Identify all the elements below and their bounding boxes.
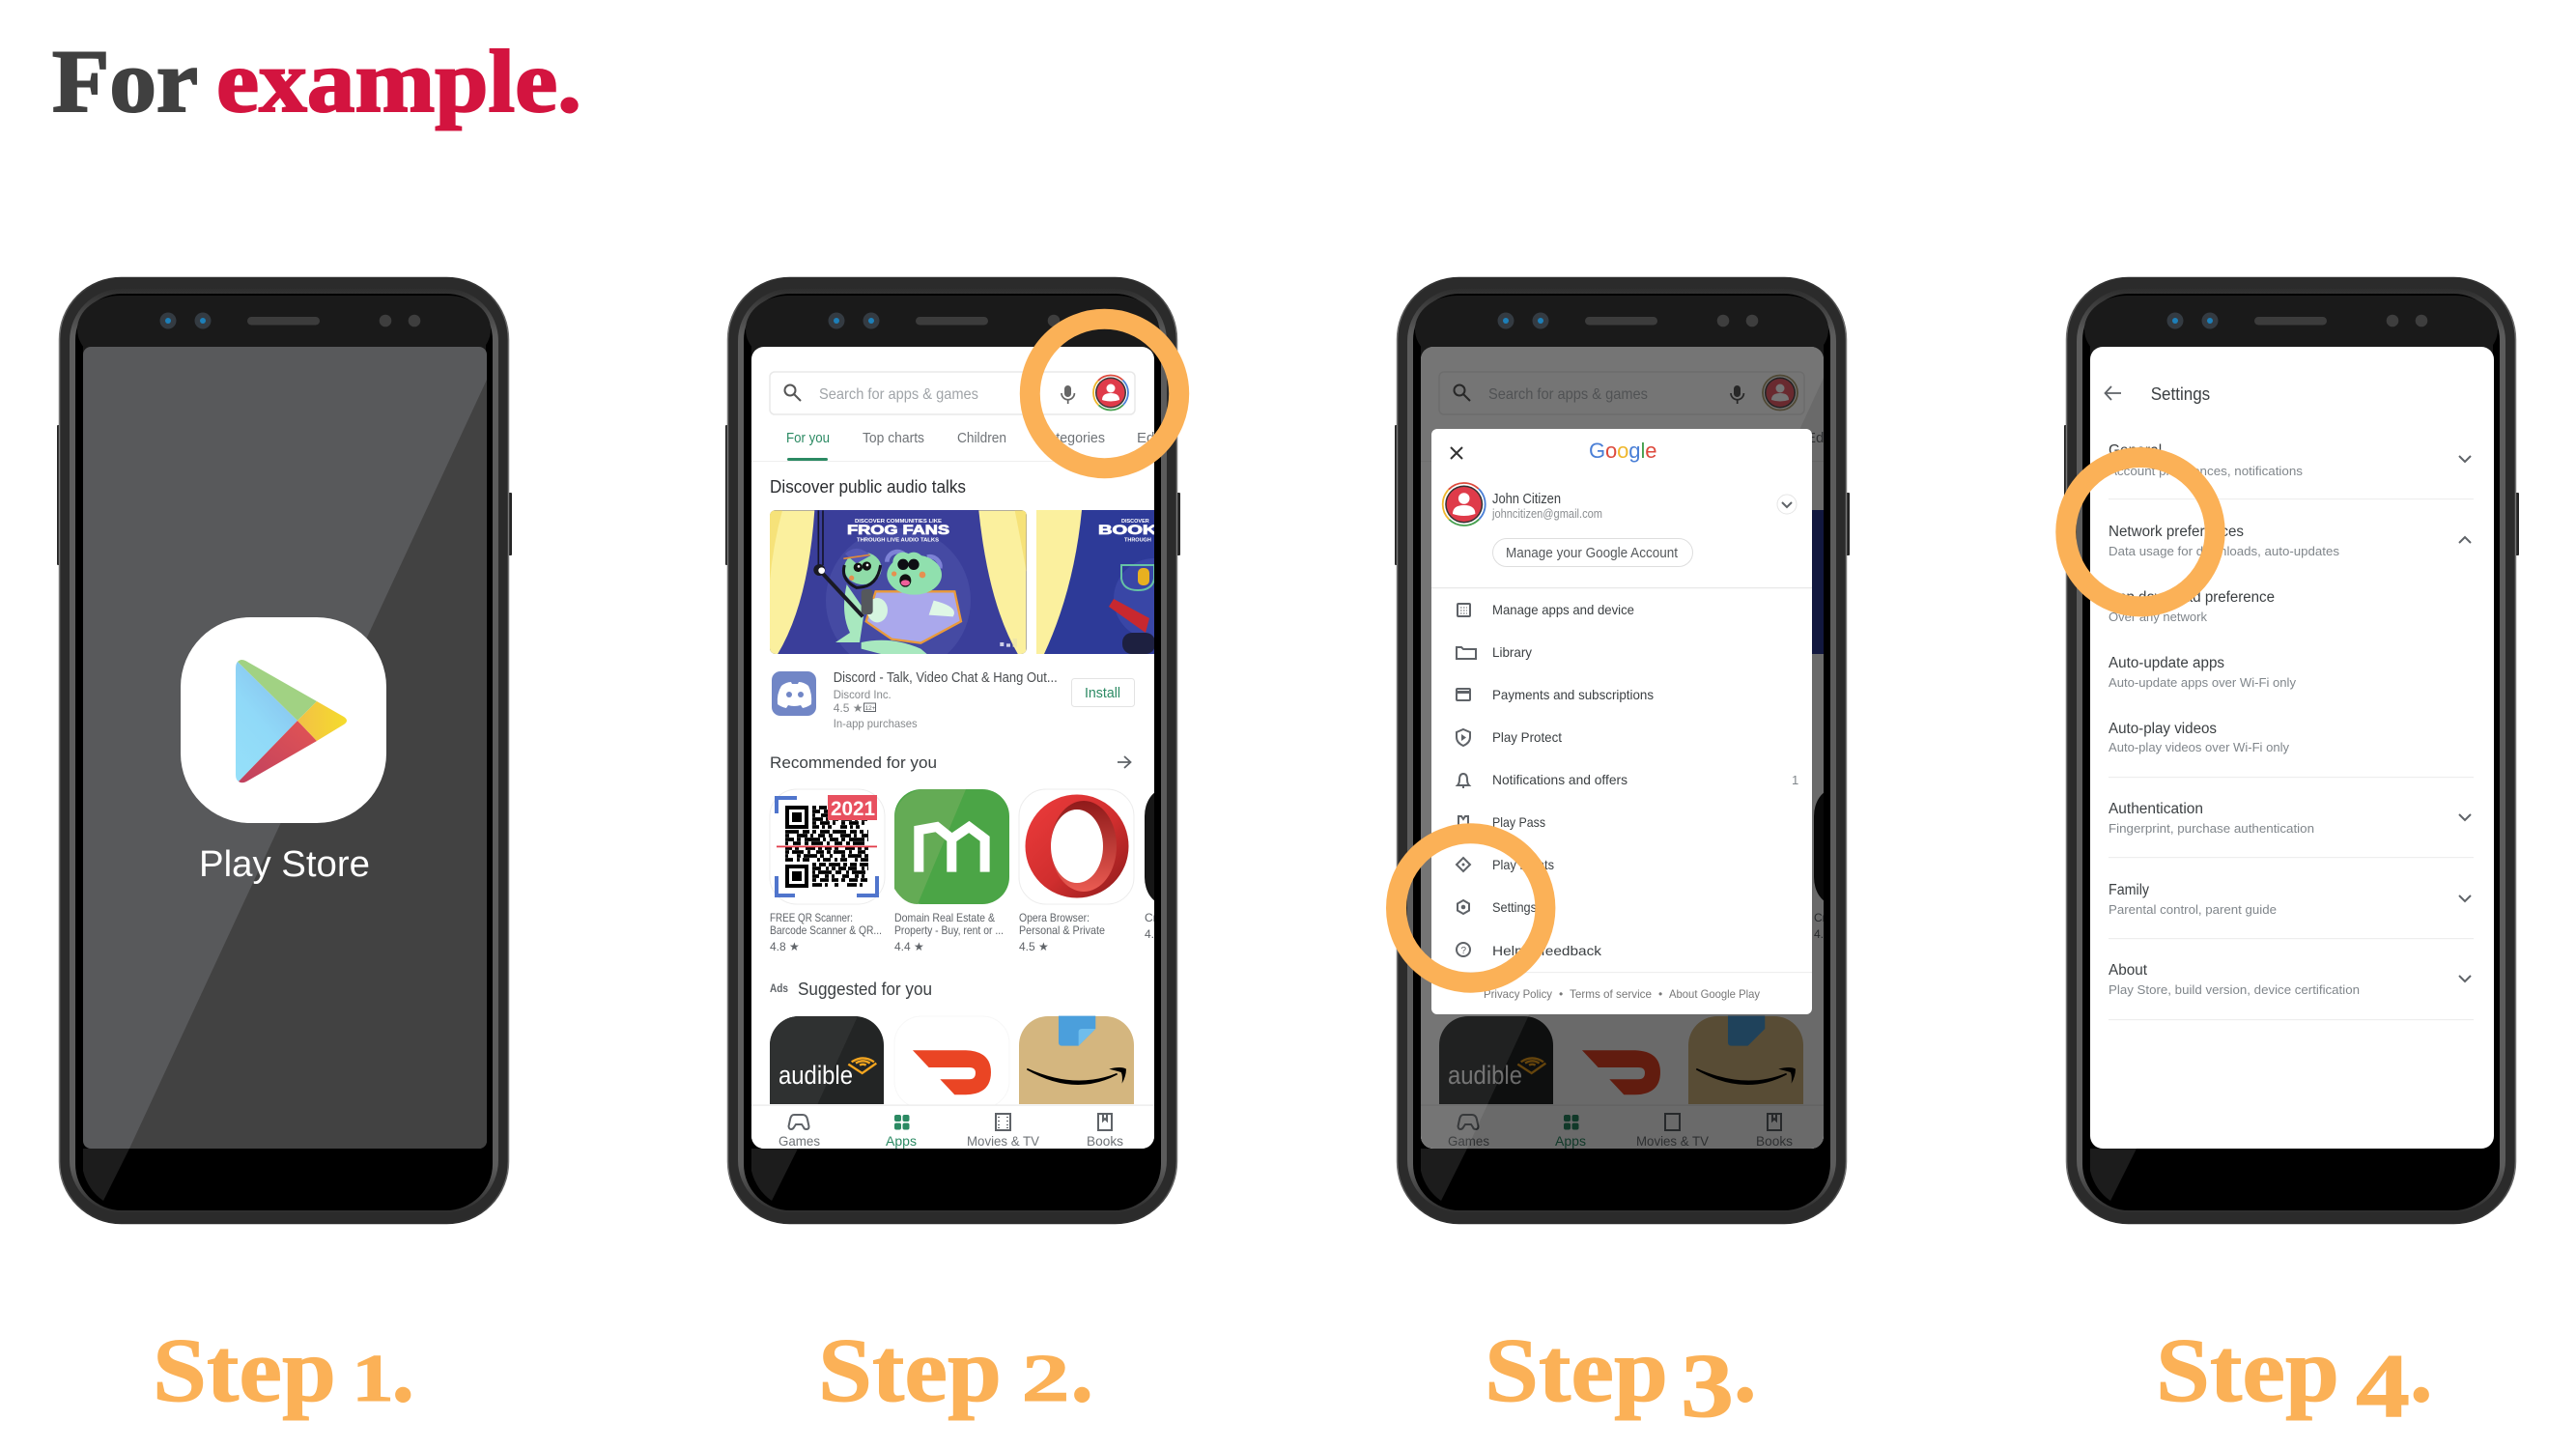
settings row: app download preference: App download preference <box>2109 589 2275 606</box>
menu item: notifications <box>1458 772 1798 787</box>
app row: Discord: In-app purchases <box>834 717 918 730</box>
highlight ring: settings menu item <box>1397 834 1545 982</box>
screen <box>751 347 1195 1150</box>
manage account button <box>1493 539 1692 566</box>
menu item: play pass: Play Pass <box>1492 814 1545 830</box>
step 4 label: 4 <box>2356 1336 2410 1436</box>
tabs: Top charts <box>863 430 924 446</box>
settings row: authentication <box>2109 801 2474 858</box>
nav labels: Books <box>1087 1133 1123 1149</box>
menu item: play protect <box>1457 729 1562 746</box>
settings row: about <box>2109 962 2474 1020</box>
search bar: Search for apps & games <box>1488 386 1648 403</box>
step 3 label: . <box>1734 1321 1756 1421</box>
background slivers <box>1812 432 1824 938</box>
app labels: 4.4 ★ <box>894 940 924 953</box>
menu item: play points <box>1457 857 1554 872</box>
menu item: play protect: Play Protect <box>1492 729 1562 745</box>
account name and email: johncitizen@gmail.com <box>1491 507 1602 521</box>
highlight ring: network preferences <box>2066 458 2215 607</box>
icon: Audible: audible <box>778 1061 853 1090</box>
dimmed bottom navigation: Movies & TV <box>1636 1133 1710 1149</box>
phone frame <box>57 278 512 1223</box>
phone frame <box>725 278 1180 1223</box>
tabs: For you <box>786 430 830 446</box>
banner: book lovers <box>1036 510 1154 654</box>
menu item: settings <box>1458 899 1537 915</box>
nav labels: Apps <box>886 1133 917 1149</box>
step 2 label <box>818 1321 1093 1421</box>
app labels: Opera Browser: <box>1019 911 1090 924</box>
icon: Domain app <box>894 789 1009 904</box>
settings row: auto-update apps: Auto-update apps over Wi-Fi only <box>2109 675 2296 690</box>
menu item: play pass <box>1458 814 1545 830</box>
settings row: network preferences <box>2109 524 2471 558</box>
settings row: family <box>2109 882 2474 939</box>
phone 4: settings screen <box>2064 278 2519 1223</box>
icon: Audible <box>770 1016 884 1105</box>
icon: next app sliver <box>1145 792 1154 900</box>
settings row: about: Play Store, build version, device certification <box>2109 982 2360 997</box>
icon: Amazon <box>1019 1016 1134 1104</box>
settings row: network preferences: Network preferences <box>2109 524 2244 540</box>
settings row: general: General <box>2109 442 2162 459</box>
footer links: • <box>1559 987 1563 1001</box>
menu item: library <box>1457 644 1532 660</box>
step 2 label: Step <box>818 1321 1002 1421</box>
step 4 label: . <box>2410 1321 2432 1421</box>
menu item: payments: Payments and subscriptions <box>1492 687 1654 702</box>
title: example. <box>216 32 581 130</box>
search bar <box>770 368 1135 417</box>
app row: Discord: 12+ <box>865 705 876 712</box>
menu item: notifications: 1 <box>1792 773 1798 787</box>
title <box>52 32 581 130</box>
suggested heading: Ads <box>770 983 788 995</box>
menu item: play points: Play Points <box>1492 857 1554 872</box>
app labels: Personal & Private <box>1019 923 1105 937</box>
menu item: settings: Settings <box>1492 899 1537 915</box>
dimmed store screen <box>1421 347 1853 1150</box>
suggested heading: Suggested for you <box>798 980 932 999</box>
settings screen background <box>2090 347 2494 1149</box>
footer links: Privacy Policy <box>1484 987 1552 1001</box>
settings header: Settings <box>2151 384 2210 404</box>
app row: Discord: Install <box>1085 686 1120 701</box>
menu item: library: Library <box>1492 644 1532 660</box>
settings row: auto-update apps: Auto-update apps <box>2109 655 2224 671</box>
app row: Discord: 4.5 ★ <box>834 701 863 715</box>
nav labels <box>778 1136 1122 1149</box>
app labels: FREE QR Scanner: <box>770 911 853 924</box>
app labels: Property - Buy, rent or ... <box>894 923 1004 937</box>
settings header <box>2106 384 2210 404</box>
recommended heading <box>771 755 1132 771</box>
panel: Google account menu <box>1431 429 1812 1014</box>
settings row: authentication: Fingerprint, purchase authentication <box>2109 821 2314 836</box>
settings row: auto-play videos: Auto-play videos <box>2109 721 2217 737</box>
banner: frog fans: DISCOVER COMMUNITIES LIKE <box>855 519 942 525</box>
app labels: 4.8 ★ <box>770 940 800 953</box>
background slivers: 4.7 <box>1814 927 1830 941</box>
Google logo: Google <box>1589 439 1656 463</box>
section heading: Discover public audio talks <box>770 477 966 497</box>
settings row: about: About <box>2109 962 2148 979</box>
tabs: Editors <box>1137 430 1182 446</box>
app label: Play Store <box>199 844 370 885</box>
icon: Play Store <box>181 617 386 823</box>
menu item: notifications: Notifications and offers <box>1492 772 1628 787</box>
banner: frog fans: THROUGH LIVE AUDIO TALKS <box>857 537 939 543</box>
icon: apps <box>894 1115 910 1130</box>
step 1 label: . <box>392 1321 414 1421</box>
account name and email: John Citizen <box>1492 491 1561 507</box>
account chevron <box>1777 495 1797 514</box>
menu item: manage apps: Manage apps and device <box>1492 602 1634 617</box>
icon: DoorDash <box>913 1050 991 1095</box>
banner: frog fans <box>770 510 1027 654</box>
glass glare <box>1421 347 1824 1149</box>
manage account button: Manage your Google Account <box>1506 546 1678 561</box>
settings row: authentication: Authentication <box>2109 801 2203 817</box>
step 2 label: 2 <box>1022 1342 1070 1416</box>
banner: frog fans: FROG FANS <box>847 522 949 537</box>
step 3 label <box>1485 1321 1756 1436</box>
settings row: family: Family <box>2109 882 2149 898</box>
dimmed bottom navigation: Apps <box>1555 1133 1586 1149</box>
phone 2: Play Store home <box>725 278 1195 1223</box>
menu item: help <box>1457 943 1602 958</box>
settings row: general <box>2109 442 2474 499</box>
bottom navigation <box>751 1105 1154 1150</box>
app labels: 4.7 <box>1145 927 1161 941</box>
nav labels: Movies & TV <box>967 1133 1040 1149</box>
nav labels: Games <box>778 1133 820 1149</box>
step 1 label: 1 <box>352 1342 394 1416</box>
phone frame <box>1395 278 1850 1223</box>
step 1 label: Step <box>153 1321 336 1421</box>
icon: close <box>1451 447 1462 459</box>
dimmed bottom navigation: Games <box>1448 1133 1489 1149</box>
app row: Discord: Discord - Talk, Video Chat & Hang Out... <box>834 670 1058 686</box>
dimmed bottom navigation <box>1421 1105 1824 1150</box>
settings row: auto-update apps <box>2109 655 2296 690</box>
settings row: auto-play videos <box>2109 721 2474 778</box>
app row: Discord: Discord Inc. <box>834 688 892 701</box>
icon: books <box>1098 1114 1112 1130</box>
icon: QR scanner app <box>770 789 885 904</box>
background slivers: Editors <box>1806 430 1852 446</box>
step 2 label: . <box>1070 1321 1093 1421</box>
settings row: app download preference: Over any network <box>2109 610 2207 624</box>
icon: games <box>788 1115 809 1129</box>
settings row: auto-play videos: Auto-play videos over Wi-Fi only <box>2109 740 2289 754</box>
menu item: help: ? <box>1460 946 1466 956</box>
dimmed bottom navigation: Books <box>1756 1133 1793 1149</box>
footer links: About Google Play <box>1669 987 1760 1001</box>
app labels: Barcode Scanner & QR... <box>770 923 882 937</box>
app labels: Domain Real Estate & <box>894 911 995 924</box>
icon: QR scanner app: 2021 <box>831 798 875 820</box>
settings row: network preferences: Data usage for downloads, auto-updates <box>2109 544 2339 558</box>
banner: book lovers: DISCOVER <box>1121 519 1149 525</box>
recommended heading: Recommended for you <box>770 753 937 772</box>
menu item: help: Help & feedback <box>1492 943 1602 958</box>
step 4 label <box>2156 1321 2432 1436</box>
phone frame <box>2064 278 2519 1223</box>
phone 3: account menu over dimmed store <box>1395 278 1853 1223</box>
title: For <box>52 32 198 130</box>
tabs: Children <box>957 430 1006 446</box>
footer links: Terms of service <box>1570 987 1652 1001</box>
app row: Discord <box>772 670 1134 730</box>
account name and email <box>1491 491 1602 521</box>
step 3 label: 3 <box>1681 1336 1734 1436</box>
icon: movies <box>996 1114 1010 1130</box>
step 4 label: Step <box>2156 1321 2339 1421</box>
settings row: general: Account preferences, notifications <box>2109 464 2304 478</box>
search bar: Search for apps & games <box>819 386 978 403</box>
banner: book lovers: THROUGH <box>1124 537 1151 543</box>
home screen background <box>83 347 487 1149</box>
app labels: Cr <box>1145 911 1157 924</box>
app labels: 4.5 ★ <box>1019 940 1049 953</box>
dimmed app icons <box>1439 1016 1803 1104</box>
app labels <box>770 914 1154 951</box>
footer links: • <box>1658 987 1662 1001</box>
icon: Opera browser <box>1019 789 1134 904</box>
settings row: app download preference <box>2109 589 2275 624</box>
dimmed app icons: audible <box>1448 1061 1522 1090</box>
step 3 label: Step <box>1485 1321 1668 1421</box>
search bar <box>1439 372 1804 414</box>
dim overlay <box>1421 347 1824 1149</box>
background slivers: Cr <box>1814 911 1826 924</box>
step 1 label <box>153 1321 414 1421</box>
footer links <box>1484 987 1760 1001</box>
highlight ring: account avatar <box>1030 319 1179 469</box>
banner: book lovers: BOOKI <box>1098 522 1162 537</box>
tabs: Categories <box>1038 430 1105 446</box>
settings row: family: Parental control, parent guide <box>2109 902 2277 917</box>
account avatar <box>1434 474 1494 534</box>
phone 1: Play Store icon on dark screen <box>57 278 512 1223</box>
tabs <box>751 432 1153 462</box>
